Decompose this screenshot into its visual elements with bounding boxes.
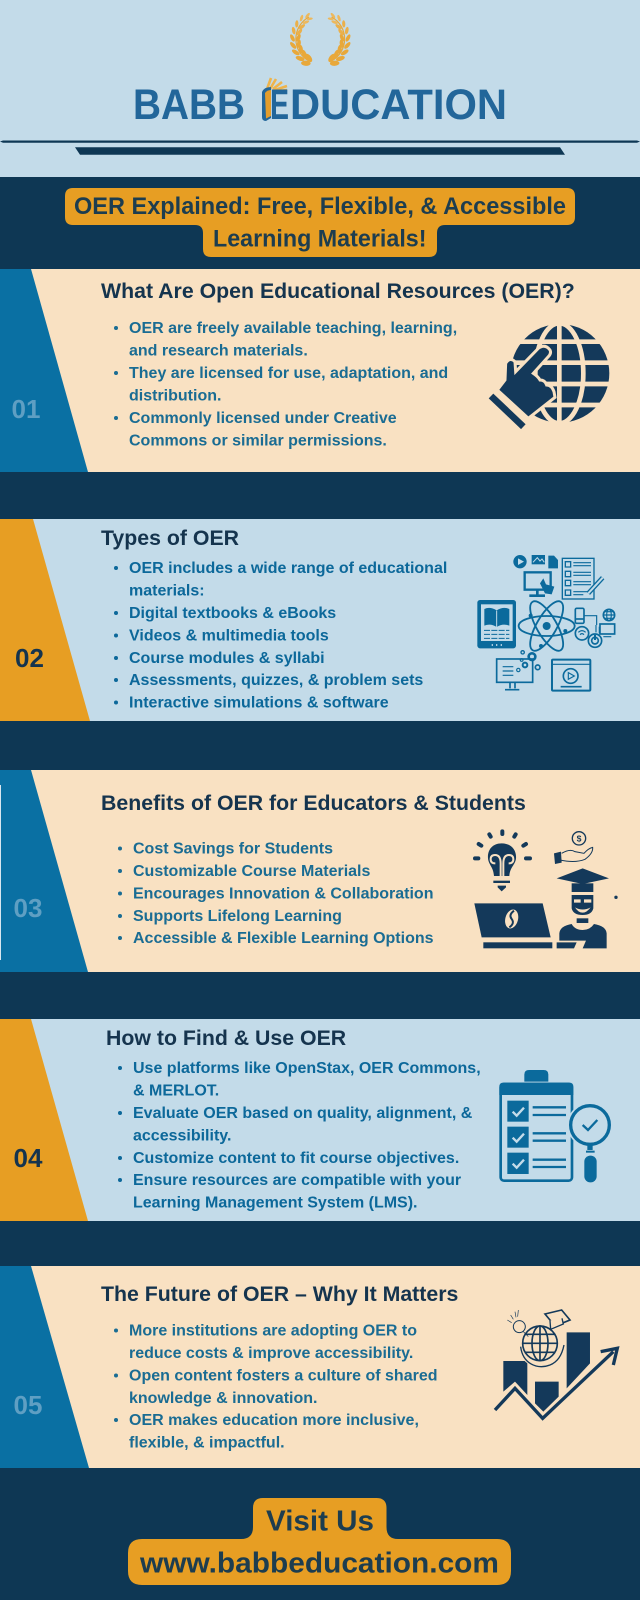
bullet list: reduce costs & improve accessibility. (129, 1345, 413, 1362)
bullet list (118, 840, 434, 947)
bullet list: Open content fosters a culture of shared (129, 1368, 438, 1384)
call to action: visit us: Visit Us (266, 1506, 374, 1538)
bullet list: Interactive simulations & software (129, 694, 389, 712)
heading: How to Find & Use OER (106, 1026, 346, 1050)
bullet list: Accessible & Flexible Learning Options (133, 930, 434, 947)
title banner: OER Explained: Free, Flexible, & Accessible (74, 193, 566, 220)
icon: idea, laptop, graduate: $ (577, 833, 582, 843)
logo: Babb Education: BABB (133, 81, 245, 129)
bullet list: OER makes education more inclusive, (129, 1412, 419, 1429)
bullet list: OER includes a wide range of educational (129, 560, 447, 577)
bullet list (114, 1322, 438, 1452)
icon: idea, laptop, graduate (474, 831, 618, 948)
bullet list: Supports Lifelong Learning (133, 908, 342, 925)
bullet list: knowledge & innovation. (129, 1390, 317, 1407)
bullet list: flexible, & impactful. (129, 1434, 285, 1452)
bullet list: OER are freely available teaching, learning, (129, 320, 457, 337)
bullet list: Evaluate OER based on quality, alignment, & (133, 1105, 473, 1122)
panel: section 05 future of OER (0, 1266, 640, 1468)
bullet list: Digital textbooks & eBooks (129, 605, 336, 622)
logo: Babb Education: DUCATION (290, 81, 507, 129)
bullet list: and research materials. (129, 342, 308, 360)
bullet list: Commonly licensed under Creative (129, 410, 397, 427)
icon: hand touching globe (491, 323, 610, 427)
bullet list: Course modules & syllabi (129, 650, 325, 667)
bullet list: Commons or similar permissions. (129, 432, 387, 450)
logo: Babb Education (133, 78, 507, 129)
title banner: Learning Materials! (213, 226, 426, 252)
heading: Benefits of OER for Educators & Students (101, 791, 526, 815)
bullet list: Customize content to fit course objectives. (133, 1150, 459, 1167)
panel: section 04 how to find and use (0, 1019, 640, 1221)
panel: section 01 what are OER (0, 269, 640, 472)
bullet list (114, 560, 447, 712)
bullet list: Cost Savings for Students (133, 840, 333, 858)
bullet list: Assessments, quizzes, & problem sets (129, 672, 423, 689)
number 05: 05 (14, 1390, 42, 1420)
bullet list (114, 320, 457, 450)
number 01: 01 (12, 394, 40, 424)
title banner (65, 188, 575, 257)
bullet list: Learning Management System (LMS). (133, 1194, 418, 1212)
panel: section 03 benefits (0, 770, 640, 972)
icon: checklist with magnifier (499, 1070, 609, 1182)
call to action: visit us (128, 1498, 511, 1585)
call to action: visit us: www.babbeducation.com (139, 1548, 499, 1580)
bullet list: materials: (129, 582, 205, 600)
icon: laurel wreath (288, 12, 352, 70)
bullet list: Encourages Innovation & Collaboration (133, 886, 433, 902)
icon: growth chart with globe (495, 1310, 617, 1418)
bullet list: Customizable Course Materials (133, 863, 370, 880)
bullet list: More institutions are adopting OER to (129, 1322, 417, 1340)
number 03: 03 (14, 893, 42, 923)
number 04: 04 (14, 1143, 43, 1173)
heading: The Future of OER – Why It Matters (101, 1282, 458, 1306)
bullet list: distribution. (129, 388, 221, 404)
logo: Babb Education: E (270, 81, 289, 129)
bullet list: Use platforms like OpenStax, OER Commons, (133, 1060, 481, 1077)
bullet list (118, 1060, 481, 1212)
number 02: 02 (15, 643, 44, 673)
panel: header (0, 0, 640, 177)
bullet list: Videos & multimedia tools (129, 628, 329, 644)
bullet list: & MERLOT. (133, 1082, 219, 1100)
panel: section 02 types of OER (0, 519, 640, 721)
icon: educational materials cluster (477, 555, 615, 691)
heading: What Are Open Educational Resources (OER)? (101, 279, 575, 303)
bullet list: accessibility. (133, 1128, 231, 1144)
bullet list: Ensure resources are compatible with your (133, 1172, 461, 1189)
bullet list: They are licensed for use, adaptation, and (129, 365, 448, 382)
heading: Types of OER (101, 526, 239, 550)
